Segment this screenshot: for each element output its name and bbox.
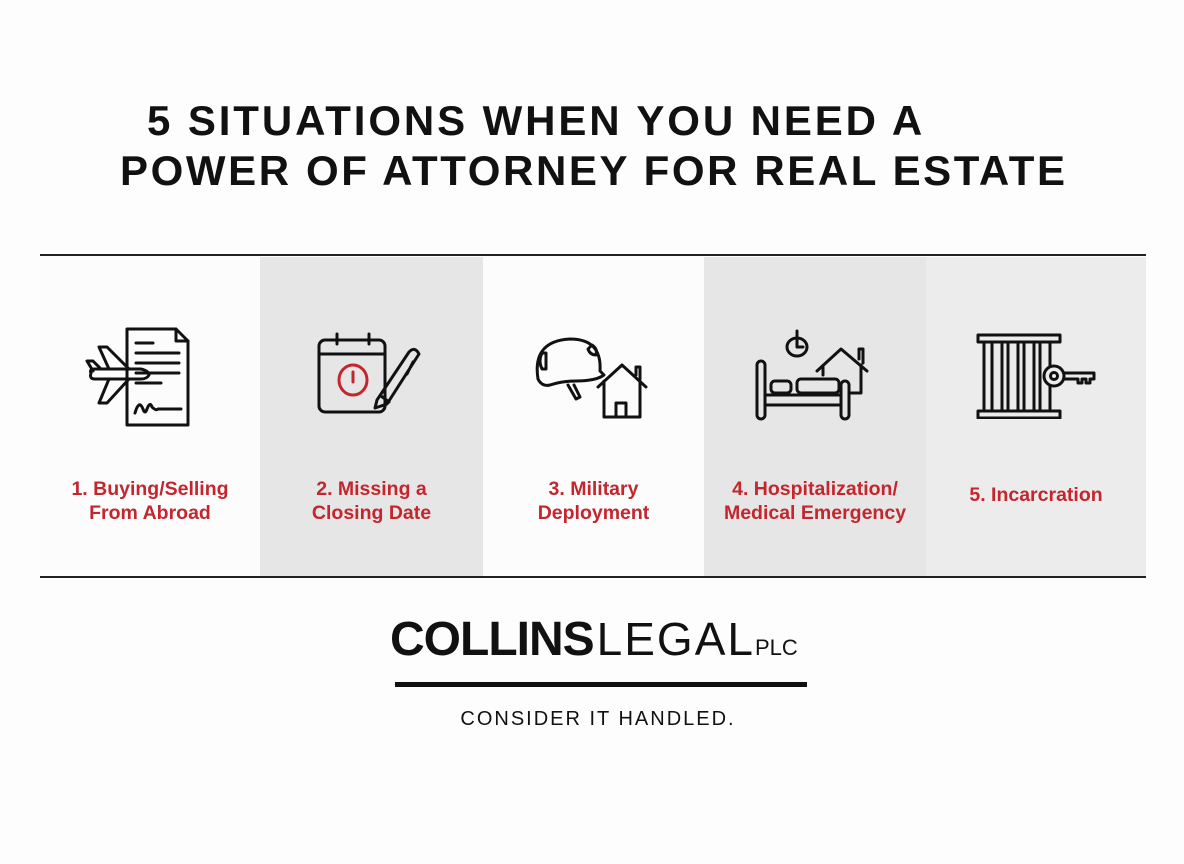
panel: missing a closing date bbox=[260, 257, 483, 576]
icon: bars and key bbox=[976, 334, 1096, 419]
panel: buying/selling from abroad: From Abroad bbox=[89, 502, 211, 524]
panel: hospitalization bbox=[704, 257, 926, 576]
panel: buying/selling from abroad bbox=[40, 257, 260, 576]
panel: incarceration: 5. Incarcration bbox=[969, 484, 1103, 506]
panel: military deployment bbox=[483, 257, 704, 576]
logo underline bar bbox=[395, 682, 807, 687]
panel: military deployment: 3. Military bbox=[549, 478, 638, 500]
panel: military deployment: Deployment bbox=[538, 502, 649, 524]
icon: plane and document bbox=[85, 328, 190, 426]
tagline: CONSIDER IT HANDLED. bbox=[460, 708, 736, 730]
icon: calendar with pen bbox=[318, 332, 420, 414]
title bbox=[120, 97, 1068, 194]
icon: bed clock house bbox=[756, 330, 869, 420]
panel: hospitalization: Medical Emergency bbox=[724, 502, 906, 524]
panel: missing a closing date: Closing Date bbox=[312, 502, 431, 524]
panel: incarceration bbox=[926, 257, 1146, 576]
title: POWER OF ATTORNEY FOR REAL ESTATE bbox=[120, 147, 1068, 194]
logo: COLLINSLEGALPLC bbox=[390, 613, 798, 666]
panel: hospitalization: 4. Hospitalization/ bbox=[732, 478, 898, 500]
panel: buying/selling from abroad: 1. Buying/Selling bbox=[71, 478, 229, 500]
panel: missing a closing date: 2. Missing a bbox=[316, 478, 427, 500]
icon: helmet and house bbox=[536, 338, 648, 418]
title: 5 SITUATIONS WHEN YOU NEED A bbox=[147, 97, 925, 144]
